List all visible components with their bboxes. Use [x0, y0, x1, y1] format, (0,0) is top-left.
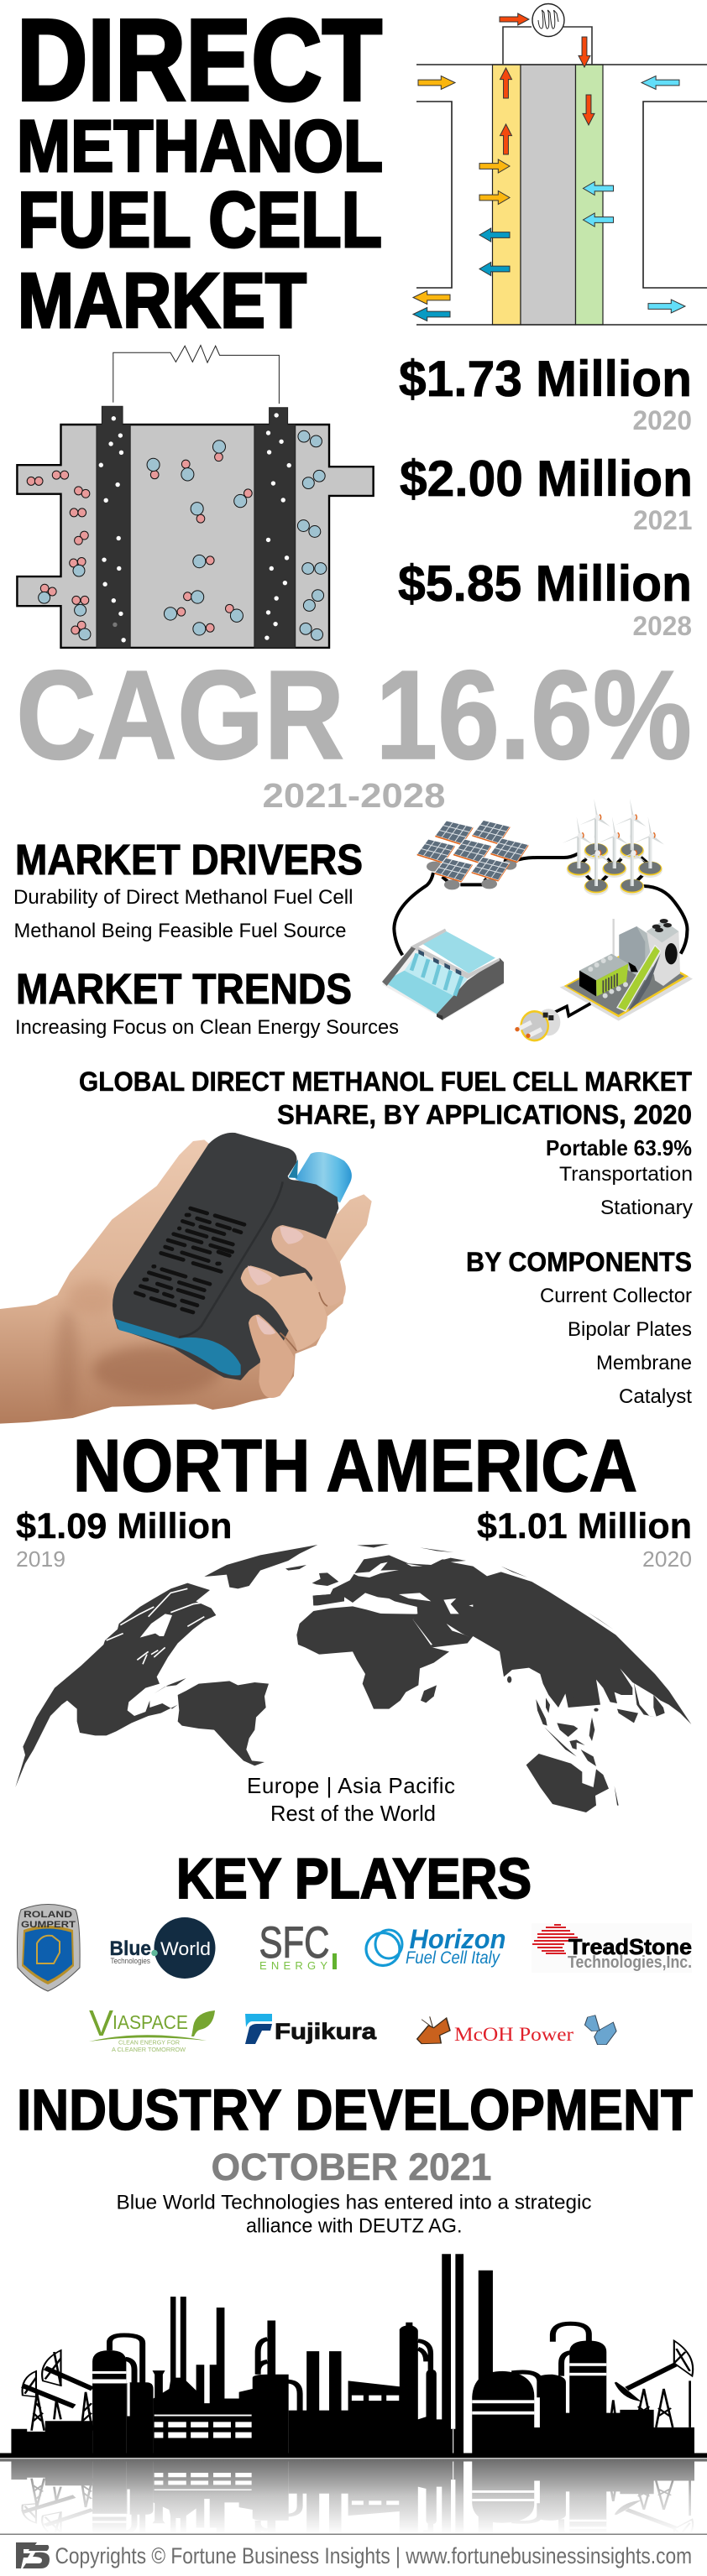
logo: Roland Gumpert: ROLAND [24, 1910, 72, 1920]
north america values: 2019 [16, 1546, 65, 1572]
power plant [560, 919, 693, 1021]
components list: Bipolar Plates [568, 1318, 692, 1341]
logo: Fujikura [245, 2014, 377, 2044]
logo: Roland Gumpert: GUMPERT [21, 1920, 76, 1930]
applications list: Transportation [559, 1163, 693, 1186]
logo: Horizon Fuel Cell Italy: Horizon [410, 1924, 505, 1954]
logo: McOH Power: McOH Power [454, 2024, 573, 2045]
heading: key players: KEY PLAYERS [176, 1847, 532, 1911]
market size figures: 2028 [633, 611, 692, 641]
logo: Blue World Technologies: World [160, 1938, 211, 1959]
north america values: 2020 [642, 1546, 692, 1572]
components list: Catalyst [619, 1385, 692, 1408]
panel: market drivers and trends: MARKET DRIVERS [15, 836, 363, 884]
logo: SFC Energy: ENERGY [259, 1959, 327, 1972]
dam [382, 929, 504, 1020]
logo: TreadStone Technologies: TreadStone [568, 1934, 692, 1959]
market size figures: $1.73 Million [399, 351, 692, 407]
logo: Blue World Technologies [109, 1917, 215, 1979]
other regions [247, 1773, 455, 1826]
north america values [16, 1506, 692, 1572]
diagram: fuel cell membrane schematic [413, 3, 707, 325]
illustration: skyline reflection [0, 2459, 707, 2529]
other regions: Rest of the World [270, 1801, 436, 1826]
logo: Viaspace [89, 2003, 215, 2053]
logo: Roland Gumpert [17, 1905, 80, 1991]
development date and description: OCTOBER 2021 [212, 2146, 492, 2188]
panel: market drivers and trends: Durability of Direct Methanol Fuel Cell [13, 886, 354, 909]
components list [466, 1247, 692, 1408]
fingers [271, 1225, 346, 1306]
logo: Blue World Technologies: Blue [109, 1937, 151, 1960]
other regions: Europe | Asia Pacific [247, 1773, 455, 1798]
components list: Membrane [596, 1352, 692, 1374]
title: METHANOL [17, 106, 383, 187]
logo: Horizon Fuel Cell Italy: Fuel Cell Italy [406, 1948, 500, 1968]
market size figures: $2.00 Million [400, 451, 693, 507]
CAGR callout: 2021-2028 [262, 776, 445, 815]
logo: McOH Power [417, 2015, 616, 2045]
logo: Viaspace: IASPACE [113, 2011, 188, 2033]
illustration: hand holding portable fuel cell [0, 1133, 372, 1424]
components list: Current Collector [540, 1285, 692, 1307]
north america values: $1.09 Million [16, 1506, 232, 1546]
logo: TreadStone Technologies [532, 1923, 692, 1973]
title: FUEL CELL [18, 175, 382, 263]
components list: BY COMPONENTS [466, 1247, 692, 1277]
logo: Viaspace: A CLEANER TOMORROW [112, 2046, 186, 2053]
illustration: renewable energy network [382, 799, 693, 1041]
plug [515, 1004, 590, 1041]
logo: Viaspace: CLEAN ENERGY FOR [118, 2039, 181, 2046]
heading: north america: NORTH AMERICA [73, 1424, 637, 1507]
applications list: Stationary [600, 1197, 693, 1219]
development date and description: Blue World Technologies has entered into a strategic [116, 2192, 591, 2214]
heading: global market share by applications: SHARE, BY APPLICATIONS, 2020 [277, 1099, 692, 1129]
panel: market drivers and trends: Methanol Being Feasible Fuel Source [13, 920, 346, 942]
panel: market drivers and trends: MARKET TRENDS [16, 965, 352, 1013]
illustration: industrial skyline [0, 2254, 707, 2458]
title [17, 0, 383, 344]
market size figures [398, 351, 693, 641]
logo: SFC Energy: SFC [259, 1918, 329, 1968]
applications list [546, 1135, 693, 1219]
footer [0, 2534, 707, 2568]
logo: TreadStone Technologies: Technologies,Inc. [568, 1953, 692, 1972]
logo: Fujikura: Fujikura [275, 2019, 377, 2044]
applications list: Portable 63.9% [546, 1135, 692, 1160]
development date and description [116, 2146, 591, 2237]
panel: market drivers and trends: Increasing Focus on Clean Energy Sources [15, 1016, 399, 1039]
panel: market drivers and trends [13, 836, 399, 1039]
heading: global market share by applications [79, 1066, 692, 1129]
logo: Viaspace: V [89, 2003, 114, 2044]
market size figures: 2021 [633, 505, 692, 535]
market size figures: 2020 [633, 405, 692, 435]
world map [15, 1544, 691, 1812]
logo: Horizon Fuel Cell Italy [366, 1924, 505, 1968]
logo: Blue World Technologies: Technologies [111, 1957, 150, 1965]
north america values: $1.01 Million [477, 1506, 692, 1546]
diagram: electrode cell with molecules [17, 345, 374, 648]
development date and description: alliance with DEUTZ AG. [246, 2215, 462, 2237]
market size figures: $5.85 Million [398, 555, 692, 612]
title: MARKET [18, 257, 306, 344]
